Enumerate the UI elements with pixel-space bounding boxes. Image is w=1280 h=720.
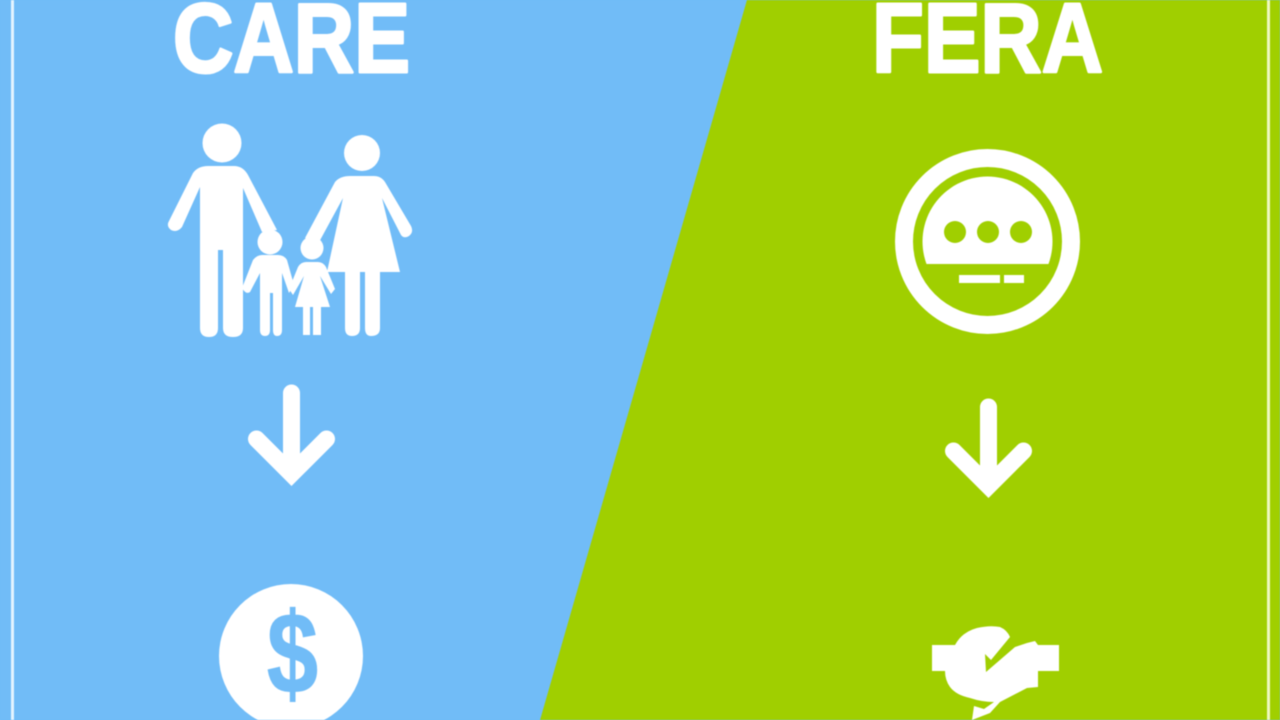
arrow: CARE down [256,393,326,474]
icon: father [168,124,277,337]
panel: FERA green background [539,0,1280,720]
icon: dollar coin [219,584,363,720]
icon: boy [242,230,294,336]
icon: dollar coin: $ [267,590,318,718]
icon: pipe valve with check [932,626,1059,720]
icon: mother [305,135,412,336]
icon: family [168,124,412,337]
icon: electric meter [904,158,1071,325]
icon: girl [289,236,335,335]
arrow: FERA down [954,407,1024,486]
